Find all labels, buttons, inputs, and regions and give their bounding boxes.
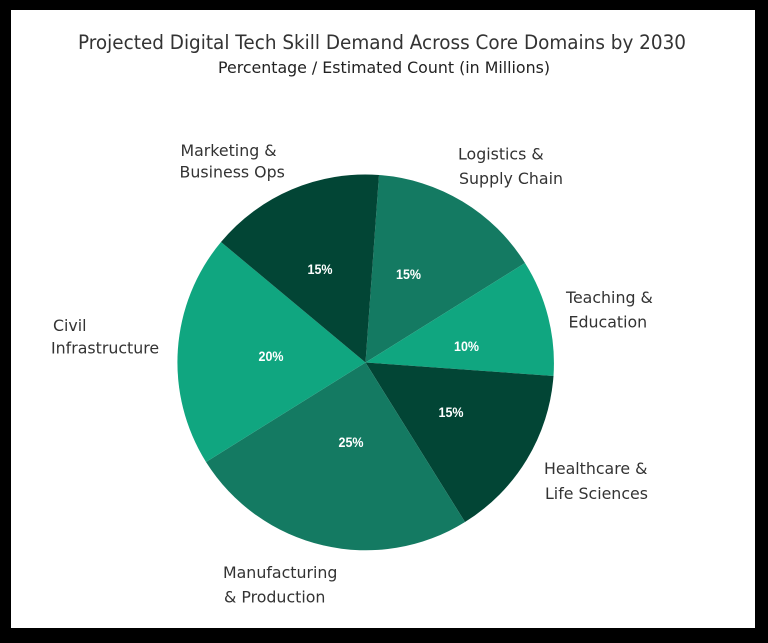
label: Logistics xyxy=(458,144,563,188)
slice: Civil xyxy=(177,242,366,462)
value: teaching 10%: 10% xyxy=(454,338,479,354)
slice: Logistics xyxy=(366,175,525,362)
label: Marketing: Marketing & xyxy=(180,141,277,160)
slice: Manufacturing xyxy=(206,362,465,550)
slice: Marketing xyxy=(221,175,379,362)
label: Teaching xyxy=(565,288,653,332)
label: Manufacturing xyxy=(223,563,337,606)
value: civil 20%: 20% xyxy=(258,348,284,364)
label: Healthcare: Life Sciences xyxy=(545,484,648,503)
label: Marketing: Business Ops xyxy=(180,162,285,182)
label: Logistics: Logistics & xyxy=(458,144,544,164)
label: Healthcare: Healthcare & xyxy=(544,459,647,478)
title: Projected Digital Tech Skill Demand Across Core Domains by 2030 xyxy=(78,31,686,54)
label: Civil xyxy=(51,316,159,358)
slice: Healthcare xyxy=(366,362,554,522)
value: logistics 15%: 15% xyxy=(396,266,421,282)
value: healthcare 15%: 15% xyxy=(438,404,464,420)
label: Healthcare xyxy=(544,459,648,503)
label: Teaching: Teaching & xyxy=(565,288,653,307)
label: Civil: Civil xyxy=(53,316,87,335)
label: Marketing xyxy=(180,141,285,182)
label: Manufacturing: Manufacturing xyxy=(223,563,337,582)
value: marketing 15%: 15% xyxy=(308,261,333,277)
label: Civil: Infrastructure xyxy=(51,338,159,358)
pie chart xyxy=(177,175,554,550)
label: Teaching: Education xyxy=(568,312,647,332)
value: manufacturing 25%: 25% xyxy=(338,434,364,450)
slice: Teaching xyxy=(366,263,554,376)
subtitle: Percentage / Estimated Count (in Millions) xyxy=(218,58,550,77)
label: Logistics: Supply Chain xyxy=(459,169,563,188)
label: Manufacturing: & Production xyxy=(224,588,325,606)
